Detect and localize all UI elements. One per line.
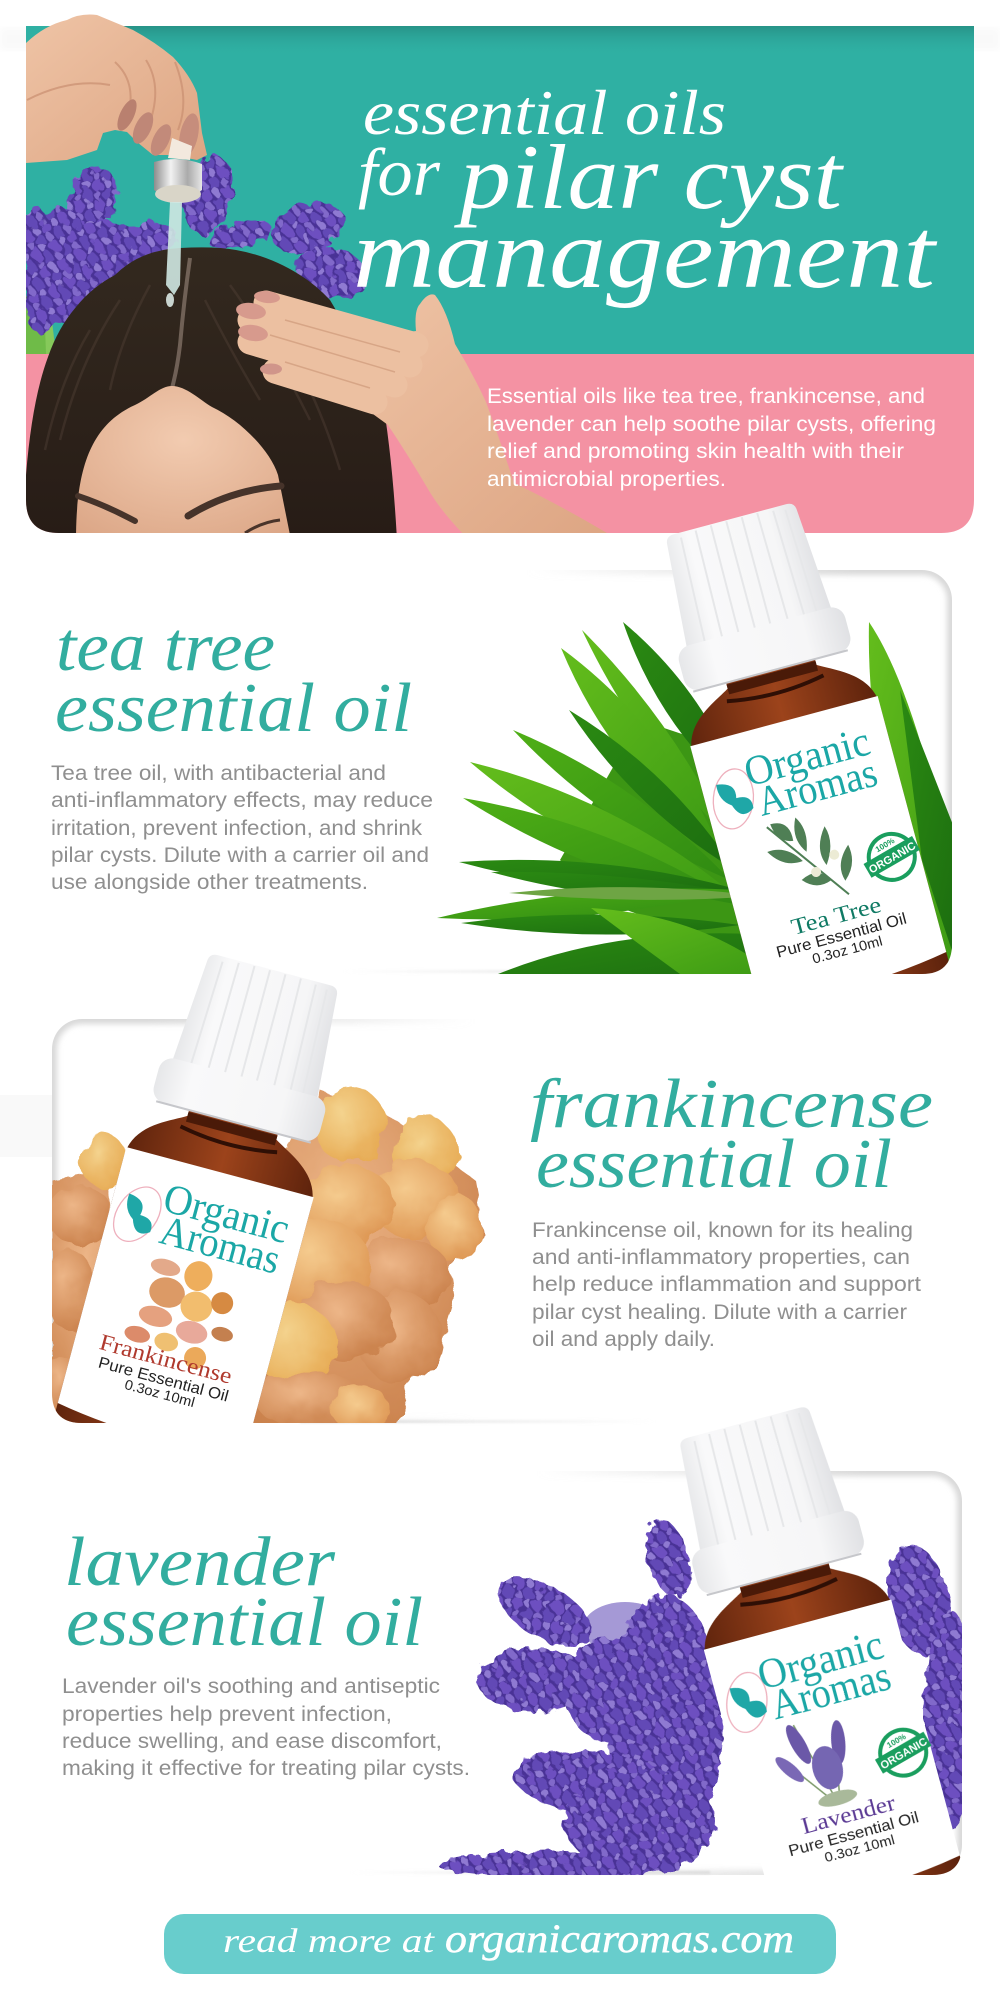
heading: essential oil	[536, 1126, 892, 1203]
footer text: organicaromas.com	[445, 1916, 794, 1961]
description: use alongside other treatments.	[51, 871, 368, 894]
product name: Frankincense	[97, 1329, 235, 1389]
brand name	[158, 1186, 288, 1273]
right hand on hair	[235, 290, 612, 536]
woman's hair	[26, 247, 397, 540]
footer button	[164, 1914, 836, 1974]
intro text: Essential oils like tea tree, frankincense, and	[487, 385, 925, 408]
herb illustration: tea tree sprig	[766, 818, 852, 895]
organic seal: 100%	[874, 836, 896, 854]
herb illustration: lavender sprigs	[775, 1720, 858, 1807]
description: oil and apply daily.	[532, 1328, 715, 1351]
description: reduce swelling, and ease discomfort,	[62, 1730, 442, 1753]
lavender flowers	[438, 1514, 976, 1879]
left eyebrow	[78, 496, 135, 521]
product details: 0.3oz 10ml	[123, 1376, 197, 1410]
card outline	[52, 1019, 558, 1424]
lavender bottle	[680, 1407, 960, 1875]
product name: Lavender	[799, 1790, 898, 1839]
heading	[530, 1066, 933, 1203]
tea tree bottle	[667, 504, 948, 974]
product details: Pure Essential Oil	[787, 1809, 921, 1860]
heading: lavender	[64, 1524, 336, 1601]
main title: management	[353, 198, 938, 309]
description	[62, 1675, 470, 1780]
footer text	[223, 1916, 794, 1961]
main title: for	[358, 134, 441, 210]
organic seal: ORGANIC	[867, 840, 918, 876]
description: anti-inflammatory effects, may reduce	[51, 789, 433, 812]
description: pilar cysts. Dilute with a carrier oil and	[51, 844, 429, 867]
butterfly logo	[726, 1672, 768, 1734]
product details: 0.3oz 10ml	[810, 933, 884, 967]
brand name: Organic	[739, 719, 875, 796]
heading: tea tree	[56, 609, 275, 686]
description: and anti-inflammatory properties, can	[532, 1246, 910, 1269]
card outline	[450, 1471, 962, 1875]
product details: Pure Essential Oil	[775, 911, 908, 962]
description	[532, 1219, 921, 1351]
description: properties help prevent infection,	[62, 1703, 392, 1726]
main title: pilar cyst	[453, 126, 845, 228]
panel: lavender essential oil	[64, 1407, 962, 1875]
intro text: lavender can help soothe pilar cysts, offering	[487, 413, 936, 436]
description: Tea tree oil, with antibacterial and	[51, 762, 386, 785]
heading: essential oil	[66, 1584, 423, 1661]
description	[51, 762, 433, 894]
brand name: Aromas	[155, 1208, 285, 1284]
panel: hero header	[0, 15, 1000, 540]
intro text	[487, 385, 936, 491]
panel: frankincense essential oil	[52, 955, 932, 1424]
card outline	[448, 570, 952, 973]
heading: essential oil	[55, 670, 412, 747]
tea tree leaves	[437, 622, 955, 980]
upper hand holding dropper	[26, 15, 207, 163]
description: making it effective for treating pilar cysts.	[62, 1757, 470, 1780]
butterfly logo	[712, 768, 754, 830]
dropper pipette	[154, 138, 202, 307]
description: pilar cyst healing. Dilute with a carrier	[532, 1301, 907, 1324]
heading	[64, 1524, 423, 1661]
butterfly logo	[112, 1186, 162, 1242]
organic seal	[874, 1727, 932, 1778]
brand name: Organic	[753, 1622, 888, 1700]
frankincense resin	[44, 1087, 485, 1430]
brand name: Aromas	[752, 750, 882, 826]
intro text: antimicrobial properties.	[487, 468, 726, 491]
description: Lavender oil's soothing and antiseptic	[62, 1675, 440, 1698]
heading: frankincense	[530, 1066, 933, 1143]
product name: Tea Tree	[788, 892, 884, 940]
product details: 0.3oz 10ml	[823, 1831, 896, 1865]
description: help reduce inflammation and support	[532, 1273, 921, 1296]
frankincense bottle	[56, 955, 337, 1423]
hero soft top shadow	[0, 28, 1000, 50]
herb illustration: resin pieces	[124, 1258, 234, 1369]
forehead and face	[76, 386, 291, 540]
footer text: read more at	[223, 1923, 436, 1960]
intro text: relief and promoting skin health with their	[487, 440, 904, 463]
product details: Pure Essential Oil	[96, 1355, 230, 1406]
main title	[353, 77, 938, 309]
brand name	[746, 732, 878, 816]
description: Frankincense oil, known for its healing	[532, 1219, 913, 1242]
description: irritation, prevent infection, and shrink	[51, 817, 423, 840]
hero teal band	[23, 15, 974, 540]
organic seal	[864, 832, 920, 882]
right eyebrow	[188, 486, 281, 516]
eye shadow	[245, 520, 280, 533]
main title: essential oils	[363, 77, 726, 148]
faint background smear	[0, 1095, 52, 1157]
brand name	[759, 1635, 891, 1720]
organic seal: 100%	[885, 1732, 908, 1750]
heading	[55, 609, 412, 747]
panel: tea tree essential oil	[52, 504, 952, 974]
hair parting	[172, 258, 190, 388]
brand name: Aromas	[766, 1653, 896, 1729]
organic seal: ORGANIC	[878, 1736, 929, 1772]
brand name: Organic	[159, 1175, 294, 1253]
